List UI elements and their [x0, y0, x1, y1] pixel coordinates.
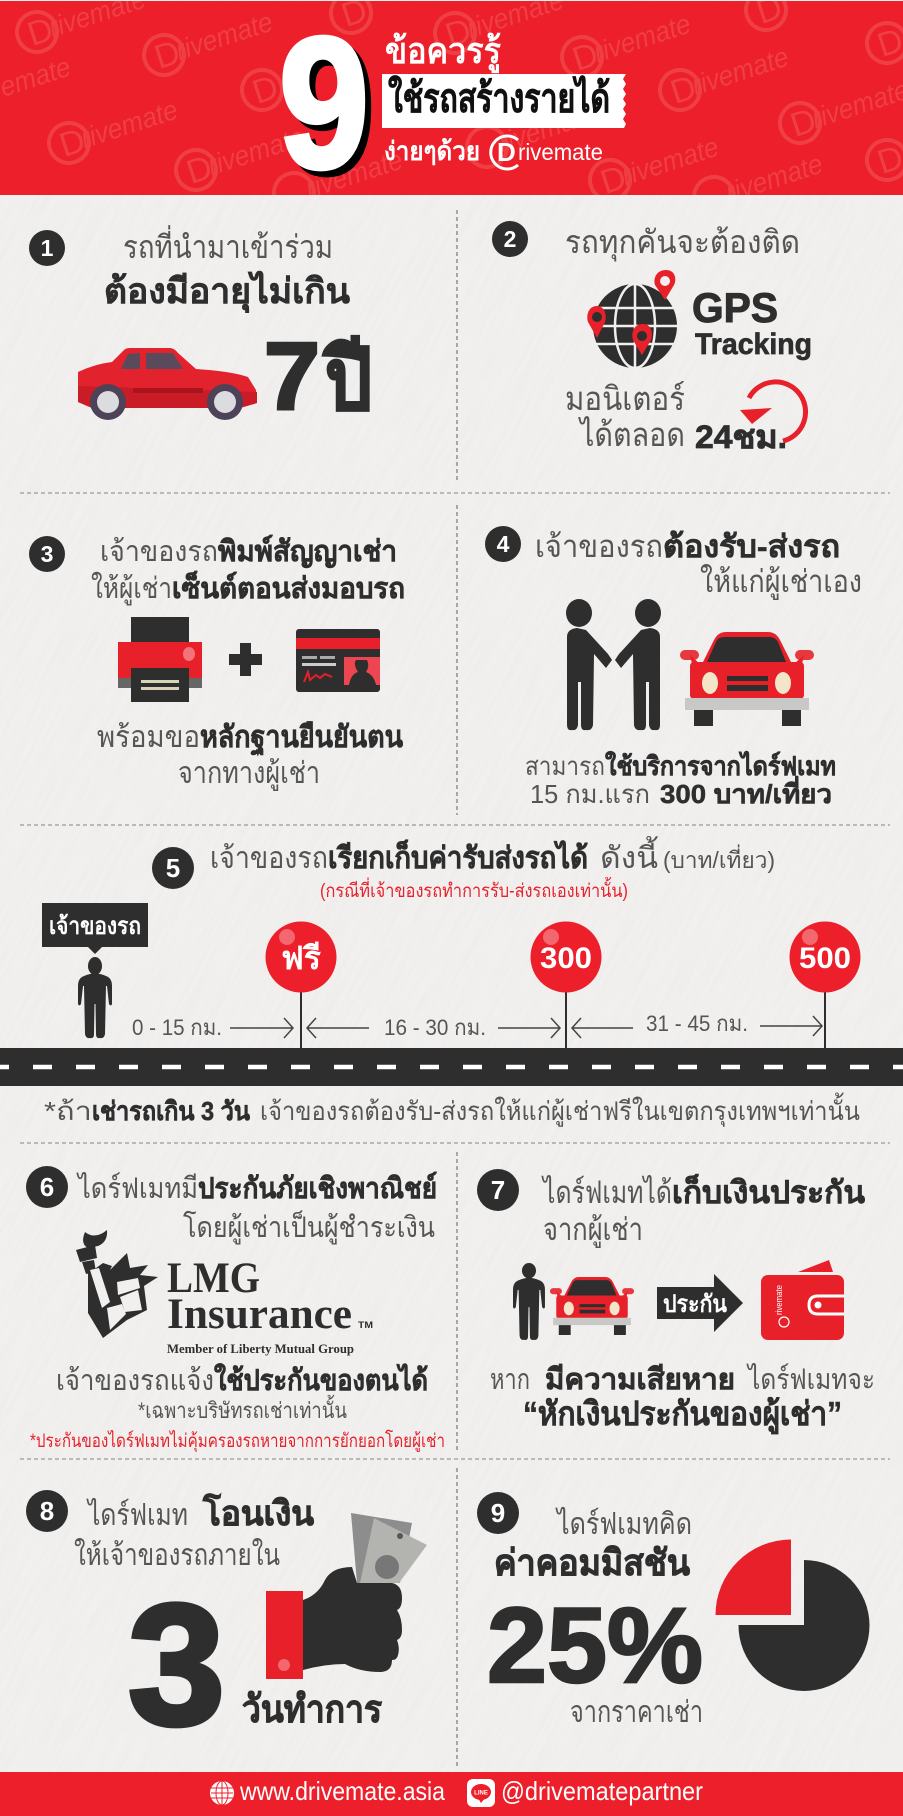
icon: LINE: LINE [474, 1790, 488, 1796]
number badge 7: 7 [491, 1175, 505, 1205]
icon: two people shaking hands [566, 599, 661, 730]
text: drivemate transfers: ไดร์ฟเมท [86, 1497, 188, 1532]
number badge 2: 2 [504, 226, 516, 252]
icon: person [78, 957, 112, 1038]
number badge 3 [29, 536, 65, 572]
text: age limit: ต้องมีอายุไม่เกิน [104, 270, 350, 313]
icon: red wallet: rivemate [774, 1285, 784, 1315]
title: line one: ข้อควรรู้ [385, 30, 502, 74]
text: cars joining: รถที่นำมาเข้าร่วม [123, 225, 333, 265]
text: drivemate transfers [86, 1493, 314, 1533]
panel 8: payment [26, 1490, 427, 1761]
header watermark pattern: rivemate [495, 98, 599, 158]
heading: delivery fee: (บาท/เที่ยว) [663, 844, 775, 873]
icon: ID card [296, 629, 380, 692]
logo: Drivemate: rivemate [518, 139, 603, 165]
text: commercial insurance: ไดร์ฟเมทมี [76, 1171, 198, 1205]
text: LINE account: @drivematepartner [501, 1776, 703, 1806]
icon: red car [78, 348, 257, 420]
number badge 6 [26, 1166, 68, 1208]
number badge 1 [29, 230, 65, 266]
header watermark pattern: D [150, 33, 185, 77]
number badge 3: 3 [41, 541, 53, 567]
text: deduct deposit: “หักเงินประกันของผู้เช่า” [523, 1395, 842, 1435]
icon: statue of liberty [76, 1230, 158, 1338]
logo: LMG Insurance: Member of Liberty Mutual Group [167, 1341, 354, 1356]
text: of rental price: จากราคาเช่า [570, 1696, 703, 1729]
title banner: white tape: ใช้รถสร้างรายได้ [388, 75, 610, 121]
distance: 31-45 km: 31 - 45 กม. [646, 1011, 748, 1036]
header watermark pattern: D [441, 11, 476, 55]
icon: globe [210, 1781, 234, 1805]
distance: 16-30 km [307, 1015, 560, 1040]
number badge 5 [152, 847, 194, 889]
text: handover line one [535, 529, 840, 564]
text: owner can claim own insurance [56, 1363, 428, 1397]
title: line three with logo: ง่ายๆด้วย [384, 136, 480, 166]
title banner: white tape [382, 74, 626, 128]
speech bubble: owner [42, 903, 148, 954]
header watermark pattern: rivemate [722, 148, 826, 208]
text: if damaged: หาก [490, 1364, 530, 1396]
panel 3: rental contract [29, 534, 405, 791]
heading: delivery fee [210, 836, 775, 875]
text: handover line one: ต้องรับ-ส่งรถ [663, 529, 840, 564]
header watermark pattern: D [55, 121, 90, 165]
panel 9: commission [477, 1492, 869, 1729]
text: drivemate service: ใช้บริการจากไดร์ฟเมท [605, 750, 836, 781]
text: if damaged: ไดร์ฟเมทจะ [746, 1362, 875, 1396]
arrow: deposit [657, 1274, 743, 1332]
red note: owner delivers: (กรณีที่เจ้าของรถทำการรับ-ส่งรถเองเท่านั้น) [320, 877, 628, 902]
red note: insurance exclusion: *ประกันของไดร์ฟเมทไม่คุ้มครองรถหายจากการยักยอกโดยผู้เช่า [30, 1429, 445, 1453]
text: big number 3: 3 [128, 1569, 225, 1761]
number badge 6: 6 [40, 1172, 54, 1202]
distance: 16-30 km: 16 - 30 กม. [384, 1015, 486, 1040]
sign: free: ฟรี [281, 940, 321, 976]
text: contract line one: เจ้าของรถ [100, 536, 218, 568]
text: Tracking: Tracking [695, 328, 812, 361]
text: 24 hours: 24ชม. [695, 419, 787, 455]
heading: delivery fee: เรียกเก็บค่ารับส่งรถได้ [328, 839, 588, 875]
text: contract line one: พิมพ์สัญญาเช่า [218, 534, 397, 569]
sign: 500: 500 [799, 942, 851, 975]
sign: free [266, 922, 336, 1048]
header watermark pattern: D [23, 10, 58, 54]
text: owner can claim own insurance: เจ้าของรถแจ้ง [56, 1365, 214, 1397]
logo: LMG Insurance: TM [358, 1320, 373, 1330]
text: ask for proof line one: หลักฐานยืนยันตน [200, 721, 403, 757]
header watermark pattern: D [182, 148, 217, 192]
icon: circular arrow [740, 382, 806, 441]
text: if damaged [490, 1362, 875, 1396]
text: monitor: มอนิเตอร์ [565, 380, 685, 417]
text: ask for proof line one: พร้อมขอ [97, 721, 200, 754]
icon: plus [229, 643, 262, 676]
text: from renter: จากผู้เช่า [543, 1212, 643, 1248]
sign: 300 [530, 922, 602, 1048]
title: big number 9: 9 [279, 0, 369, 207]
text: commercial insurance [76, 1171, 437, 1205]
number badge 9 [477, 1492, 519, 1534]
text: first 15 km price: 15 กม.แรก [530, 779, 650, 809]
number badge 2 [492, 221, 528, 257]
number badge 4: 4 [497, 531, 510, 557]
text: 25 percent: 25% [487, 1585, 703, 1705]
panel 6: insurance [26, 1166, 445, 1453]
header watermark pattern: D [248, 68, 283, 112]
icon: printer [118, 617, 202, 702]
icon: red car front small [550, 1277, 634, 1335]
text: website: www.drivemate.asia [239, 1776, 445, 1806]
header watermark pattern [0, 1, 903, 195]
footer [0, 1772, 903, 1816]
header watermark pattern: D [786, 101, 821, 145]
header watermark pattern: D [666, 68, 701, 112]
sign: 500 [790, 922, 860, 1048]
text: contract line two: ให้ผู้เช่า [91, 571, 172, 606]
text: handover line two: ให้แก่ผู้เช่าเอง [700, 564, 862, 600]
number badge 8: 8 [40, 1496, 54, 1526]
text: rental companies only: *เฉพาะบริษัทรถเช่าเท่านั้น [138, 1395, 347, 1423]
text: owner can claim own insurance: ใช้ประกันของตนได้ [214, 1363, 428, 1397]
text: contract line two [91, 570, 405, 606]
note: rentals over 3 days: เจ้าของรถต้องรับ-ส่งรถให้แก่ผู้เช่าฟรีในเขตกรุงเทพฯเท่านั้น [260, 1092, 860, 1127]
pie chart: 25 percent [716, 1540, 869, 1691]
text: commercial insurance: ประกันภัยเชิงพาณิชย์ [198, 1171, 437, 1205]
logo: Drivemate [491, 136, 603, 169]
text: if damaged: มีความเสียหาย [545, 1364, 735, 1396]
distance: 31-45 km [572, 1011, 822, 1038]
note: rentals over 3 days [44, 1092, 860, 1127]
text: drivemate charges: ไดร์ฟเมทคิด [555, 1506, 692, 1541]
road [0, 1048, 903, 1086]
distance: 0-15 km [132, 1015, 293, 1040]
header watermark pattern: rivemate [302, 144, 406, 204]
header banner [0, 1, 903, 195]
heading: delivery fee: เจ้าของรถ [210, 842, 328, 875]
logo: LMG Insurance: Insurance [167, 1291, 352, 1338]
header watermark pattern: D [596, 158, 631, 202]
panel 1: car age [29, 225, 372, 430]
icon: red wallet [761, 1260, 844, 1340]
arrow: deposit: ประกัน [663, 1291, 728, 1318]
text: commission: ค่าคอมมิสชัน [494, 1542, 690, 1583]
heading: delivery fee: ดังนี้ [600, 836, 658, 875]
text: first 15 km price [530, 775, 832, 809]
number badge 8 [26, 1490, 68, 1532]
icon: hand holding money [266, 1513, 427, 1679]
text: collects deposit: เก็บเงินประกัน [672, 1173, 865, 1210]
number badge 5: 5 [166, 853, 180, 883]
text: collects deposit [541, 1173, 865, 1210]
text: all the time: ได้ตลอด [577, 416, 685, 453]
number badge 4 [485, 526, 521, 562]
header watermark pattern: rivemate [204, 121, 308, 181]
header watermark pattern: rivemate [77, 94, 181, 154]
text: renter pays: โดยผู้เช่าเป็นผู้ชำระเงิน [183, 1209, 435, 1245]
text: to owner within: ให้เจ้าของรถภายใน [74, 1538, 280, 1572]
text: GPS: GPS [692, 284, 778, 331]
text: collects deposit: ไดร์ฟเมทได้ [541, 1175, 672, 1210]
text: drivemate transfers: โอนเงิน [202, 1493, 314, 1533]
logo: Drivemate: D [497, 137, 516, 167]
header watermark pattern: D [568, 35, 603, 79]
panel 5: delivery fee timeline [0, 836, 903, 1127]
text: every car must install: รถทุกคันจะต้องติด [565, 224, 800, 262]
number badge 1: 1 [41, 235, 54, 261]
note: rentals over 3 days: เช่ารถเกิน 3 วัน [92, 1096, 250, 1126]
text: business days: วันทำการ [242, 1689, 383, 1731]
sign: 300: 300 [540, 942, 592, 975]
distance: 0-15 km: 0 - 15 กม. [132, 1015, 222, 1040]
header watermark pattern: rivemate [618, 131, 722, 191]
text: first 15 km price: 300 บาท/เที่ยว [660, 775, 832, 809]
note: rentals over 3 days: *ถ้า [44, 1096, 92, 1126]
number badge 9: 9 [491, 1498, 505, 1528]
number badge 7 [477, 1169, 519, 1211]
text: drivemate service: สามารถ [525, 751, 605, 781]
text: contract line two: เซ็นต์ตอนส่งมอบรถ [172, 570, 405, 605]
text: 7 years [264, 323, 372, 430]
title: big number 9: 9 [285, 6, 375, 213]
title: line three with logo [384, 136, 603, 169]
speech bubble: owner: เจ้าของรถ [49, 913, 141, 940]
icon: LINE [467, 1779, 495, 1807]
panel 7: deposit [477, 1169, 875, 1435]
text: 7 years: ปี [322, 333, 372, 428]
icon: person [513, 1263, 545, 1340]
panel 4: car handover [485, 526, 862, 809]
header watermark pattern: rivemate [590, 8, 694, 68]
text: contract line one [100, 534, 397, 569]
text: 7 years: 7 [264, 323, 320, 430]
text: drivemate service [525, 750, 836, 781]
logo: LMG Insurance: LMG [167, 1255, 260, 1302]
header watermark pattern: rivemate [688, 41, 792, 101]
icon: red car front [680, 632, 814, 726]
panel 2: GPS tracking [492, 221, 812, 455]
logo: LMG Insurance [76, 1230, 373, 1356]
header watermark pattern: rivemate [172, 6, 276, 66]
text: handover line one: เจ้าของรถ [535, 529, 663, 564]
text: ask for proof line one [97, 721, 403, 757]
icon: globe with pins [587, 270, 677, 368]
text: ask for proof line two: จากทางผู้เช่า [178, 757, 320, 791]
